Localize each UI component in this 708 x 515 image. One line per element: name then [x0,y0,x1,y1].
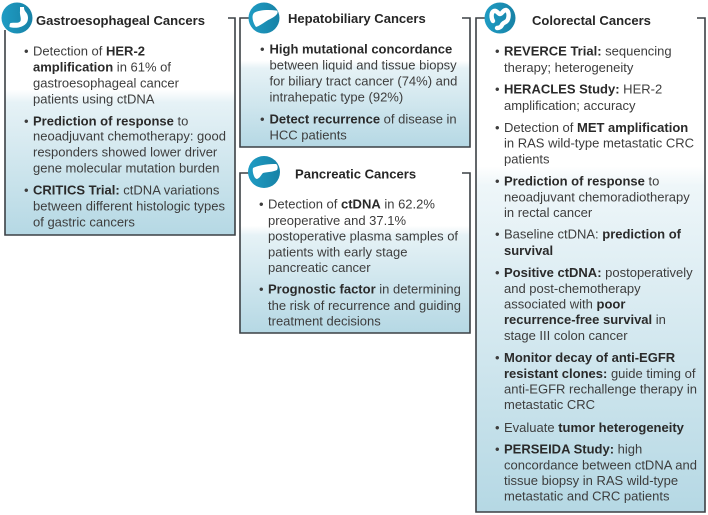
bullet list: patients [504,152,550,166]
heading: Colorectal Cancers [532,13,651,28]
bullet list: • [495,265,500,280]
bullet list: in rectal cancer [504,205,593,220]
bullet list: • [495,420,500,435]
bullet list: HERACLES Study: HER-2 [504,82,662,96]
bullet list: neoadjuvant chemotherapy: good [33,128,226,144]
panel outline [240,18,470,147]
panel outline [240,173,470,333]
bullet list: postoperative plasma samples of [268,228,458,244]
bullet list: • [495,350,500,365]
bullet list: Prediction of response to [33,114,188,128]
bullet list: between different histologic types [33,198,225,214]
panel: hepatobiliary cancers [240,2,470,147]
icon: colon [484,2,516,34]
bullet list: • [24,44,29,58]
heading: Hepatobiliary Cancers [288,11,426,26]
bullet list: gene molecular mutation burden [33,160,219,176]
bullet list: • [259,282,264,296]
bullet list: amplification; accuracy [504,98,636,113]
bullet list: of gastric cancers [33,214,135,230]
bullet list: between liquid and tissue biopsy [270,58,457,72]
bullet list: concordance between ctDNA and [504,458,697,472]
panel background [5,18,235,235]
bullet list [24,44,226,230]
bullet list: Prognostic factor in determining [268,282,461,296]
bullet list: • [259,196,264,212]
bullet list: amplification in 61% of [33,60,171,74]
panel outline [5,18,235,235]
bullet list: the risk of recurrence and guiding [268,298,461,313]
bullet list: recurrence-free survival in [504,312,666,327]
bullet list: HCC patients [270,128,347,142]
bullet list: Detection of HER-2 [33,44,145,58]
bullet list: stage III colon cancer [504,328,628,343]
bullet list: pancreatic cancer [268,260,371,275]
bullet list: therapy; heterogeneity [504,60,634,75]
bullet list: metastatic and CRC patients [504,488,670,504]
bullet list: anti-EGFR rechallenge therapy in [504,382,697,396]
bullet list: gastroesophageal cancer [33,76,180,90]
panel outline [476,18,705,512]
bullet list: and post-chemotherapy [504,281,641,296]
bullet list: Prediction of response to [504,174,659,188]
bullet list: • [495,174,500,188]
bullet list: Detect recurrence of disease in [270,112,457,126]
bullet list: preoperative and 37.1% [268,213,406,228]
bullet list: CRITICS Trial: ctDNA variations [33,182,220,198]
bullet list: associated with poor [504,296,625,312]
panel background [240,173,470,333]
icon: pancreas [248,156,280,188]
bullet list: PERSEIDA Study: high [504,442,642,456]
bullet list: • [24,182,29,198]
bullet list [495,44,697,504]
bullet list: Baseline ctDNA: prediction of [504,226,682,242]
bullet list: Positive ctDNA: postoperatively [504,265,693,280]
bullet list: Detection of ctDNA in 62.2% [268,196,435,212]
bullet list: Detection of MET amplification [504,120,688,135]
bullet list: resistant clones: guide timing of [504,366,696,381]
bullet list: REVERCE Trial: sequencing [504,44,672,58]
bullet list: neoadjuvant chemoradiotherapy [504,190,690,204]
bullet list: metastatic CRC [504,397,595,412]
icon: liver [248,2,280,34]
panel: pancreatic cancers [240,156,470,333]
bullet list: • [495,226,500,242]
bullet list: Monitor decay of anti-EGFR [504,350,676,365]
bullet list: intrahepatic type (92%) [270,90,403,104]
bullet list: in RAS wild-type metastatic CRC [504,136,694,150]
bullet list: • [495,82,500,96]
bullet list: • [260,112,265,126]
bullet list: survival [504,243,553,258]
bullet list: High mutational concordance [270,42,452,56]
bullet list: tissue biopsy in RAS wild-type [504,473,678,488]
bullet list: • [495,442,500,456]
icon: stomach [2,2,32,34]
bullet list [259,196,461,328]
bullet list: for biliary tract cancer (74%) and [270,74,457,88]
bullet list: patients using ctDNA [33,92,155,106]
panel background [476,18,705,512]
panel background [240,18,470,147]
bullet list: patients with early stage [268,244,407,260]
panel: gastroesophageal cancers [2,2,235,235]
bullet list: • [260,42,265,56]
bullet list: • [24,114,29,128]
bullet list: responders showed lower driver [33,144,218,160]
bullet list: Evaluate tumor heterogeneity [504,420,685,435]
heading: Pancreatic Cancers [295,166,416,182]
panel: colorectal cancers [476,2,705,512]
heading: Gastroesophageal Cancers [36,13,205,28]
bullet list: • [495,44,500,58]
bullet list [260,42,457,142]
bullet list: • [495,120,500,135]
bullet list: treatment decisions [268,314,381,328]
